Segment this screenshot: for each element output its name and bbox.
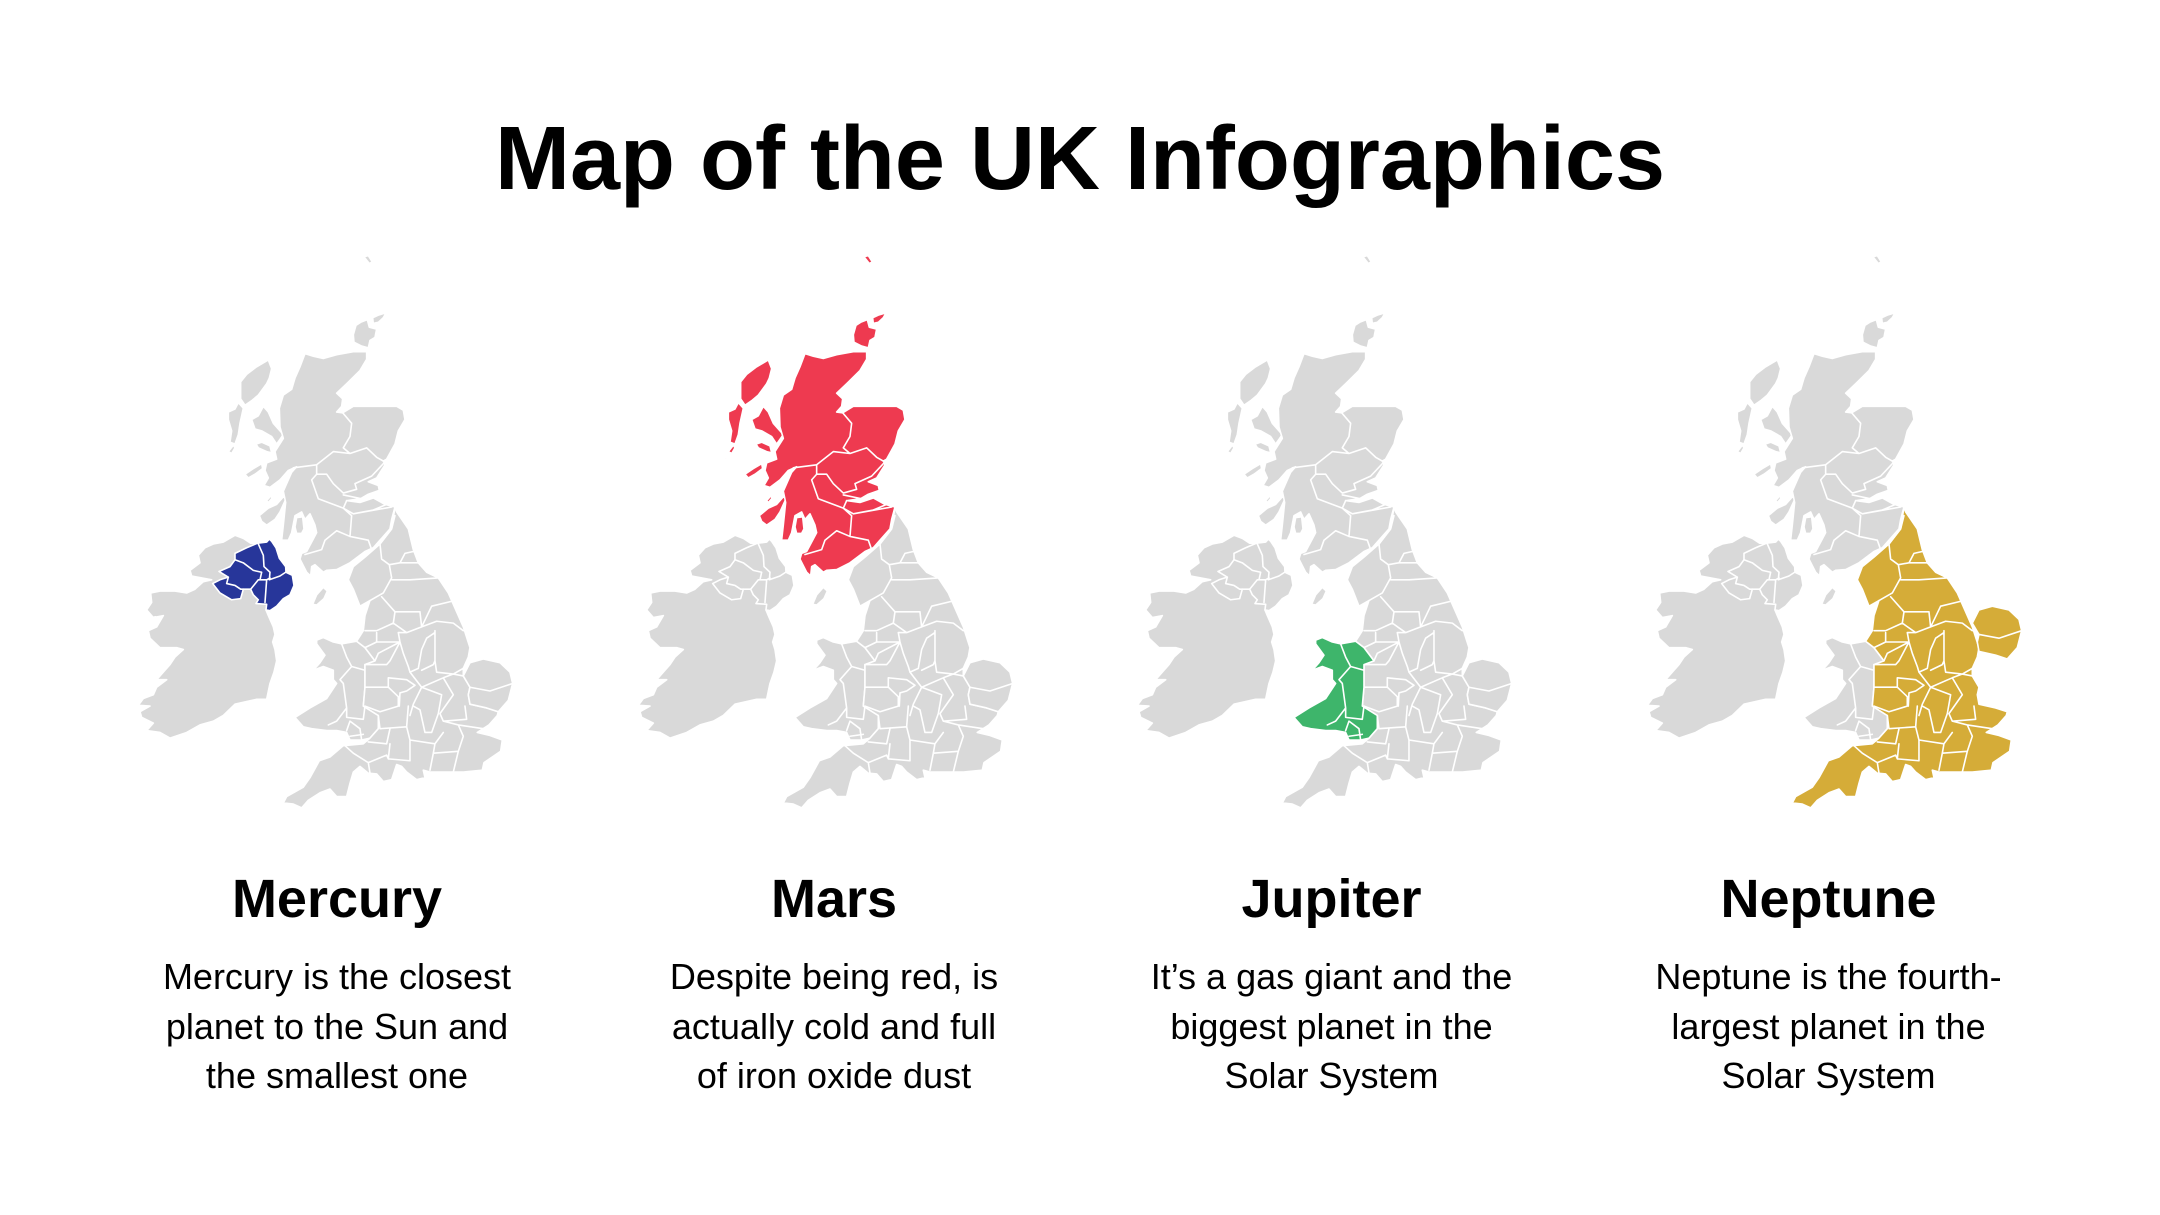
text: Mercury description: Mercury is the closest xyxy=(163,956,511,997)
heading: Mars: Mars xyxy=(771,869,897,929)
text: Neptune description: Solar System xyxy=(1721,1055,1936,1096)
map: England highlighted xyxy=(1649,256,2021,807)
text: Mars description: Despite being red, is xyxy=(670,956,998,997)
text: Mercury description: planet to the Sun and xyxy=(166,1006,508,1047)
map: Wales highlighted xyxy=(1139,256,1511,807)
text: Neptune description: Neptune is the fourth- xyxy=(1655,956,2002,997)
map: Scotland highlighted xyxy=(640,256,1012,807)
text: Mars description: actually cold and full xyxy=(672,1006,996,1047)
text: Neptune description xyxy=(1655,956,2002,1096)
text: Mercury description xyxy=(163,956,511,1096)
panel: Jupiter xyxy=(1139,256,1512,1096)
heading: Jupiter: Jupiter xyxy=(1241,869,1422,929)
title: Map of the UK Infographics xyxy=(495,109,1665,209)
text: Mercury description: the smallest one xyxy=(206,1055,468,1096)
text: Mars description xyxy=(670,956,998,1096)
text: Neptune description: largest planet in the xyxy=(1671,1006,1986,1047)
heading: Mercury: Mercury xyxy=(232,869,442,929)
panel: Mercury xyxy=(140,256,512,1096)
text: Jupiter description: It’s a gas giant and the xyxy=(1151,956,1512,997)
text: Jupiter description: Solar System xyxy=(1224,1055,1439,1096)
heading: Neptune: Neptune xyxy=(1720,869,1936,929)
text: Jupiter description: biggest planet in the xyxy=(1170,1006,1493,1047)
panel: Neptune xyxy=(1649,256,2021,1096)
map: Northern Ireland highlighted xyxy=(140,256,512,807)
text: Jupiter description xyxy=(1151,956,1512,1096)
text: Mars description: of iron oxide dust xyxy=(697,1055,971,1096)
panel: Mars xyxy=(640,256,1012,1096)
